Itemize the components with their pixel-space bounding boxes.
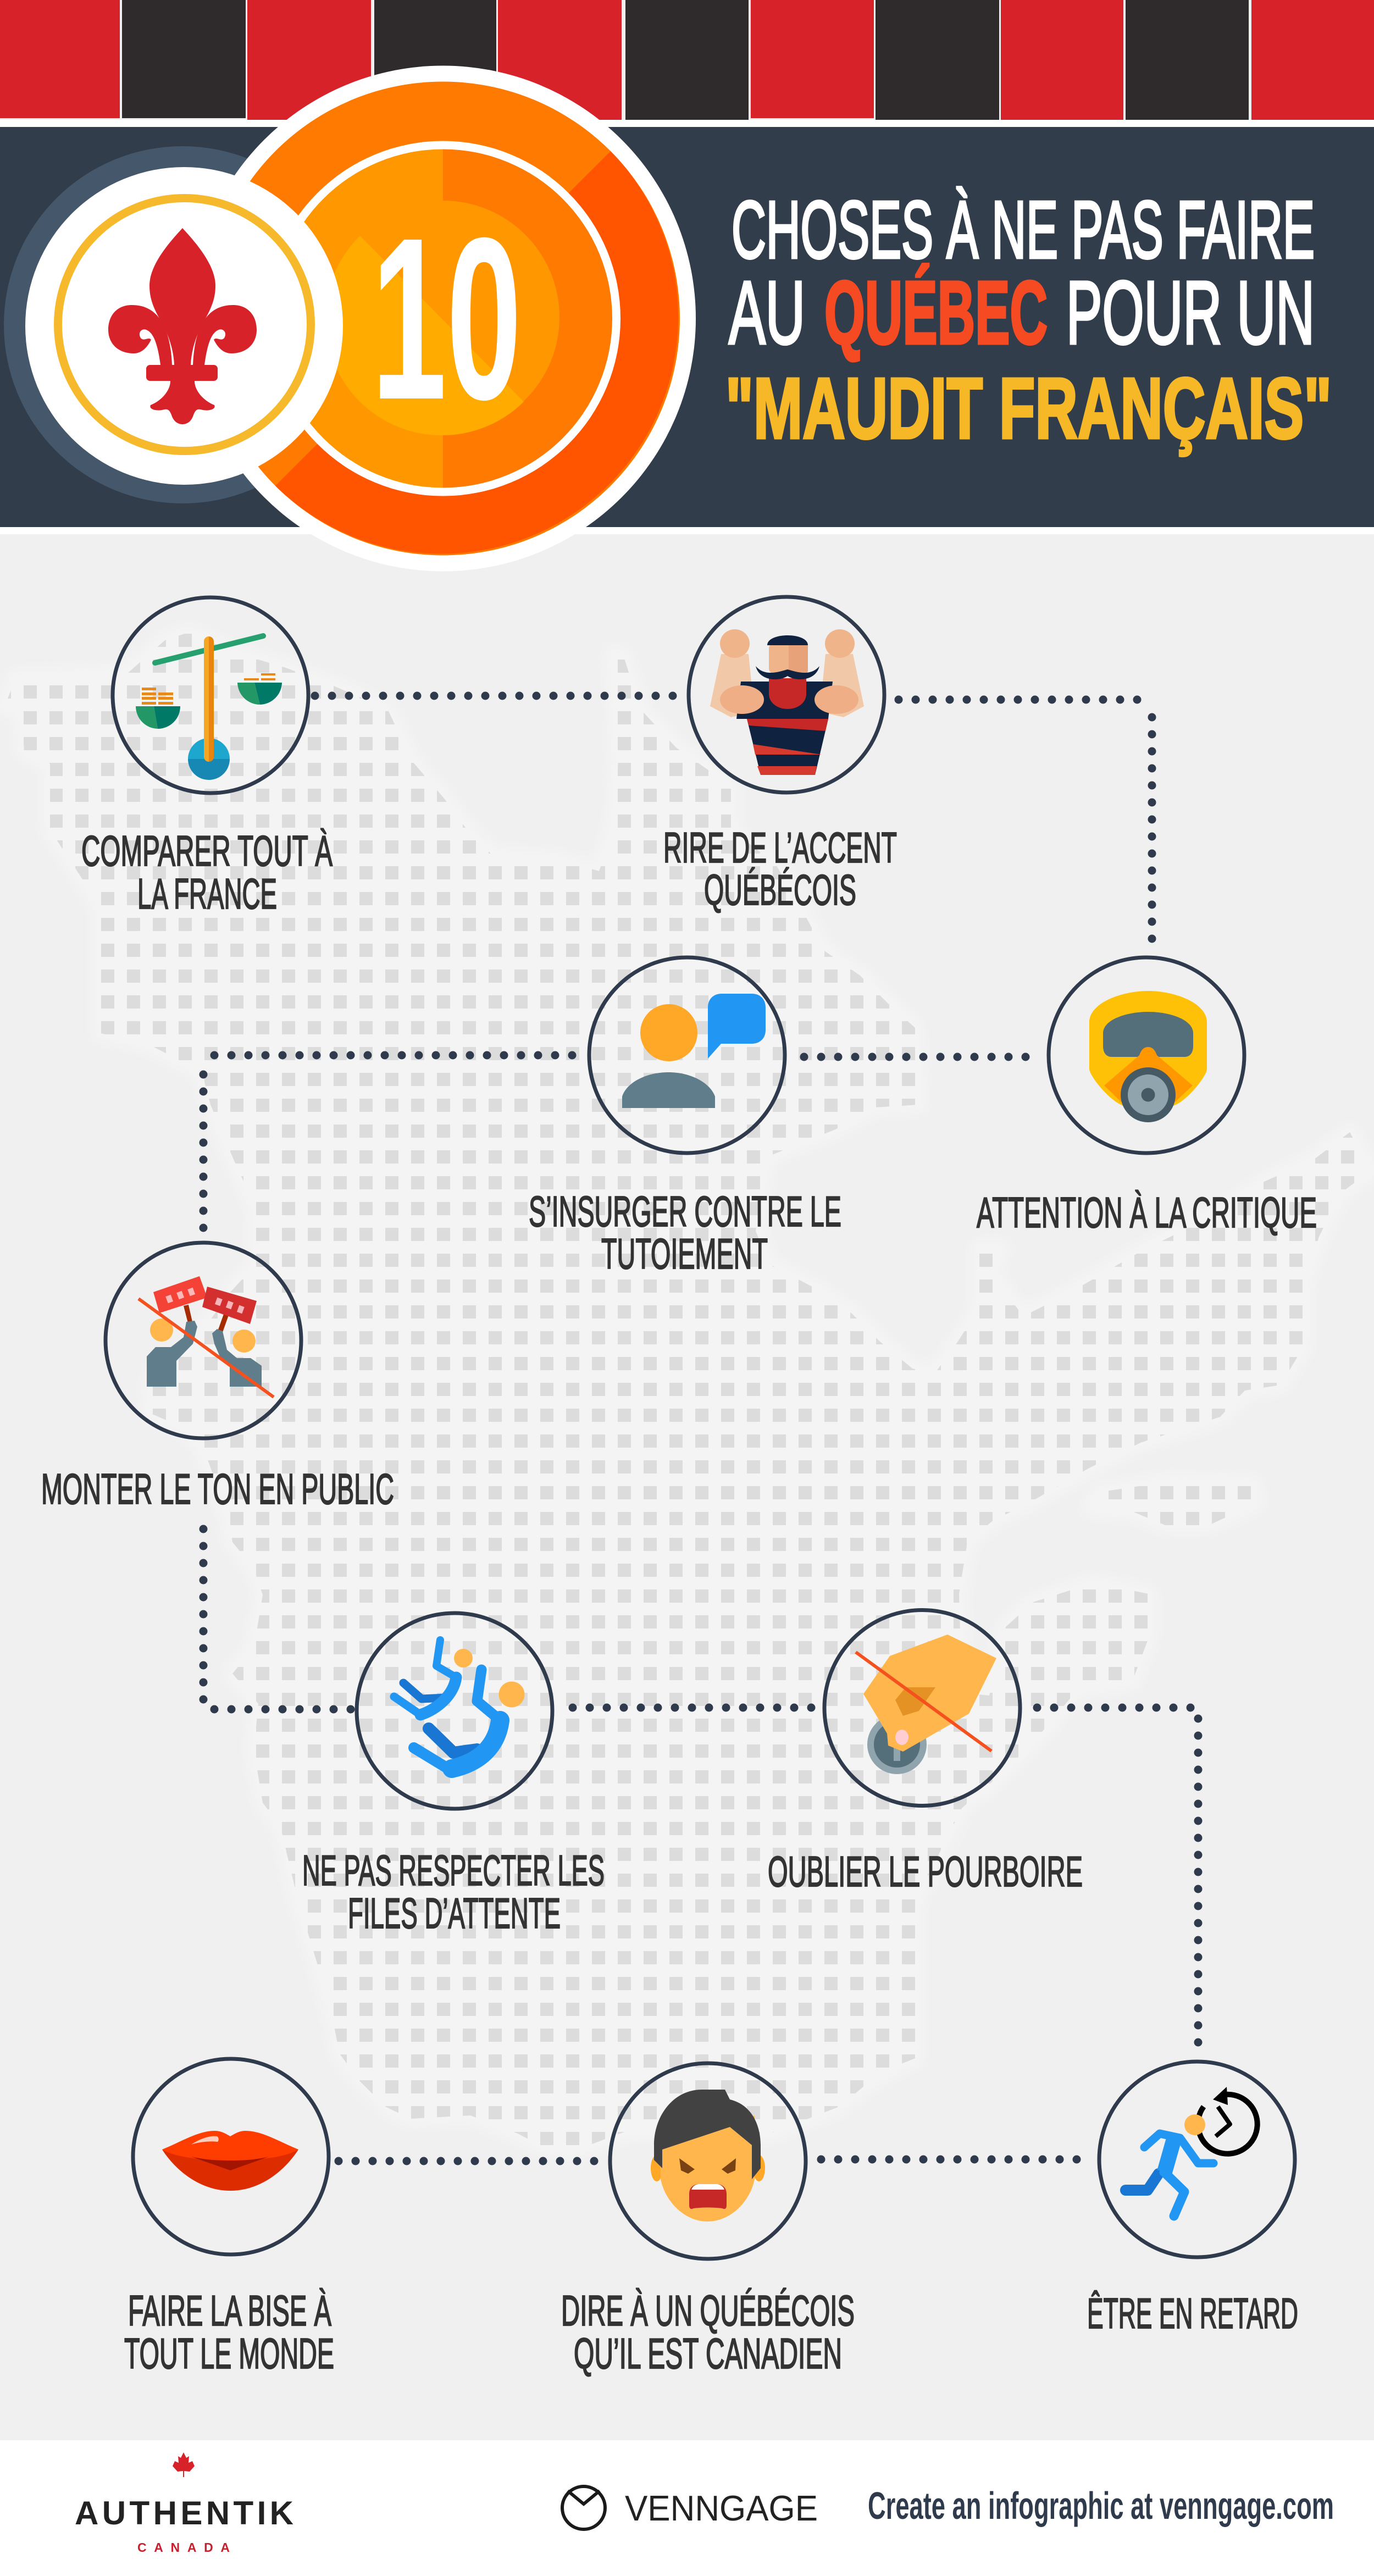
step: rire de l'accent québécois	[663, 597, 897, 914]
step: faire la bise à tout le monde	[124, 2059, 334, 2378]
label: RIRE DE L’ACCENT	[663, 823, 897, 872]
icon: strongman	[710, 629, 864, 775]
title: QUÉBEC	[824, 262, 1048, 363]
icon: lips	[162, 2131, 298, 2191]
icon: angry face	[651, 2090, 765, 2222]
top colour band	[0, 0, 1374, 120]
icon: balance scale	[136, 636, 282, 780]
label: FAIRE LA BISE À	[128, 2286, 331, 2335]
badge: number 10: 10	[372, 190, 522, 448]
footer	[0, 2440, 1374, 2576]
badge: fleur-de-lys	[25, 167, 343, 485]
logo: Authentik Canada: CANADA	[137, 2540, 230, 2555]
map of Canada: dotted land	[0, 605, 1374, 2171]
label: S’INSURGER CONTRE LE	[529, 1187, 841, 1236]
icon: hand with coin crossed out	[856, 1635, 996, 1774]
logo: Authentik Canada: AUTHENTIK	[75, 2495, 293, 2531]
step: ne pas respecter les files d'attente	[302, 1613, 605, 1937]
label: OUBLIER LE POURBOIRE	[768, 1847, 1083, 1896]
logo: Venngage	[562, 2486, 818, 2529]
logo: Venngage: VENNGAGE	[625, 2488, 818, 2528]
step: oublier le pourboire	[768, 1610, 1083, 1896]
label: DIRE À UN QUÉBÉCOIS	[561, 2286, 855, 2335]
label: TUTOIEMENT	[601, 1229, 768, 1278]
header panel	[0, 120, 1374, 534]
step: s'insurger contre le tutoiement	[529, 957, 841, 1278]
step: monter le ton en public	[41, 1243, 394, 1513]
label: NE PAS RESPECTER LES	[302, 1846, 605, 1894]
title: AU	[729, 262, 805, 363]
dotted connector path	[203, 696, 1198, 2161]
icon: gas mask	[1089, 991, 1207, 1122]
label: MONTER LE TON EN PUBLIC	[41, 1465, 394, 1513]
step: comparer tout à la France	[81, 597, 333, 918]
icon: running man with clock	[1126, 2087, 1257, 2216]
badge: number 10	[190, 66, 696, 572]
label: TOUT LE MONDE	[124, 2329, 334, 2378]
label: FILES D’ATTENTE	[348, 1889, 561, 1937]
step: dire à un québécois qu'il est canadien	[561, 2063, 855, 2378]
icon: person with speech bubble	[622, 994, 766, 1108]
step: attention à la critique	[977, 957, 1317, 1237]
icon: protest signs crossed out	[138, 1276, 274, 1397]
logo: Authentik Canada	[75, 2452, 293, 2555]
label: QU’IL EST CANADIEN	[574, 2329, 842, 2378]
label: QUÉBÉCOIS	[704, 866, 856, 914]
icon: two figures jumping the queue	[394, 1640, 524, 1771]
fleur badge halo	[4, 146, 361, 503]
label: COMPARER TOUT À	[81, 827, 333, 875]
title	[725, 185, 1332, 457]
step: être en retard	[1087, 2062, 1298, 2337]
label: LA FRANCE	[137, 869, 277, 918]
